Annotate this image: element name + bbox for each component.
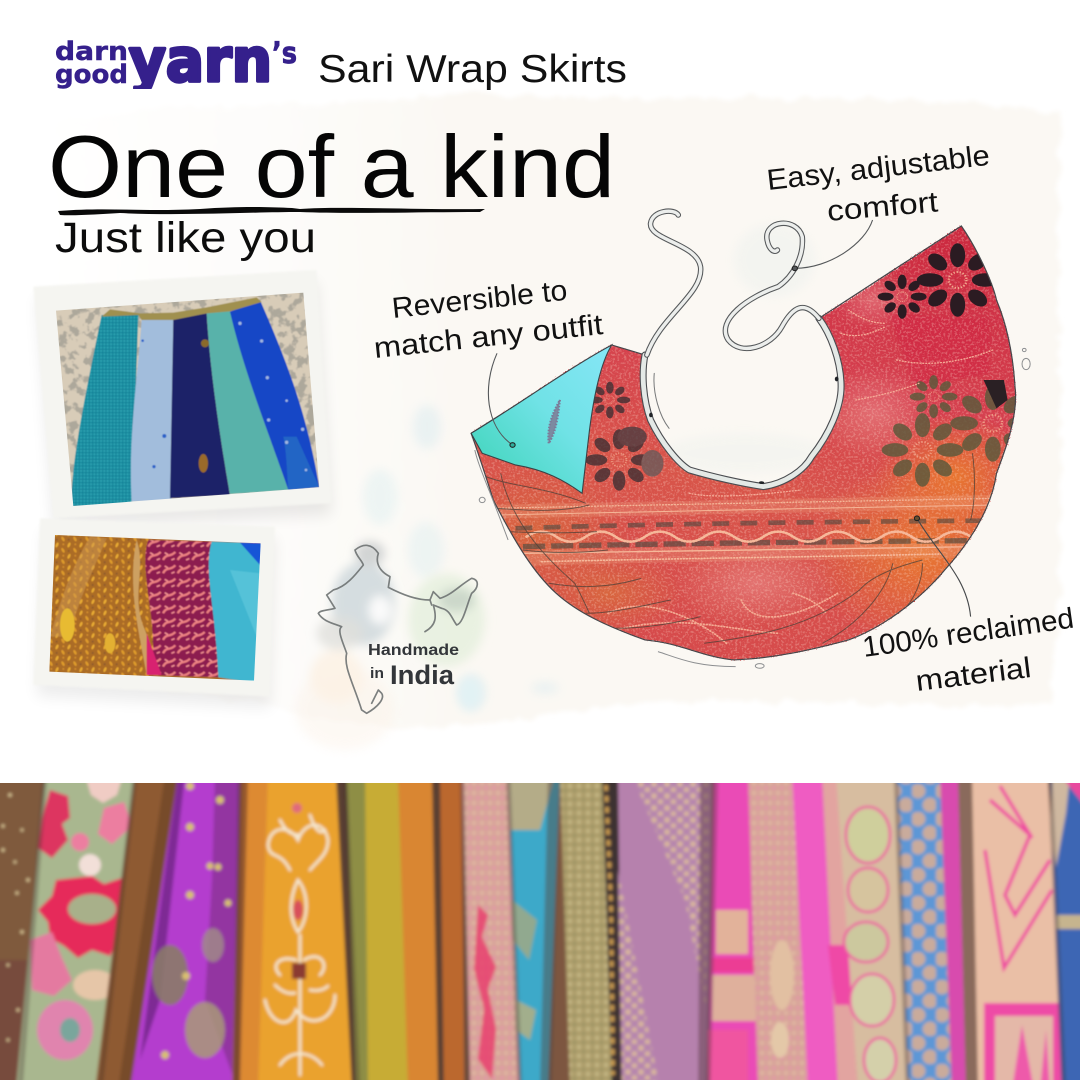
map outline bbox=[318, 545, 477, 713]
cream watercolor panel bbox=[20, 92, 1062, 728]
stripe: purple silk bbox=[130, 775, 240, 1080]
map label bbox=[368, 642, 459, 690]
stripe: blue circles bbox=[896, 775, 952, 1080]
fabric speckle bbox=[471, 223, 1019, 663]
photo: blue skirts hanging bbox=[33, 270, 332, 530]
logo: darn good yarn's: yarn bbox=[129, 26, 272, 96]
subtitle: Just like you: Just like you bbox=[55, 214, 316, 262]
waistband eyelets bbox=[649, 377, 839, 484]
logo: darn good yarn's: ’s bbox=[272, 36, 297, 70]
stripe: blue edge bbox=[1050, 775, 1080, 1080]
leader line: reversible bbox=[488, 353, 515, 447]
sketch marks bbox=[475, 348, 1030, 668]
callout: reclaimed material: 100% reclaimed bbox=[861, 603, 1076, 664]
callout: reversible: Reversible to bbox=[390, 275, 569, 325]
callout: reversible: match any outfit bbox=[372, 309, 604, 365]
map watercolor wash bbox=[310, 541, 485, 710]
leader line: reclaimed material bbox=[914, 516, 971, 617]
stripe: cyan bbox=[508, 775, 560, 1080]
heading: Sari Wrap Skirts: Sari Wrap Skirts bbox=[318, 48, 627, 91]
callout: reversible bbox=[372, 275, 604, 365]
logo: darn good yarn's bbox=[56, 40, 296, 89]
fabric colour washes bbox=[836, 485, 991, 629]
map: Handmade in India bbox=[310, 541, 485, 713]
reversible teal flap bbox=[471, 345, 612, 493]
fold shadows bbox=[20, 775, 1064, 1080]
flowers bbox=[878, 243, 998, 319]
brush underline bbox=[58, 207, 485, 215]
title: One of a kind: One of a kind bbox=[48, 117, 615, 216]
stripe: gold coil bbox=[540, 775, 622, 1080]
stripe: sage floral bbox=[16, 775, 135, 1080]
callout: reclaimed material bbox=[861, 603, 1076, 698]
callout: reclaimed material: material bbox=[914, 652, 1033, 698]
photo: fabric close-up bbox=[33, 518, 275, 708]
map label: in bbox=[370, 665, 384, 682]
callout: easy adjustable comfort: comfort bbox=[826, 186, 939, 228]
stripe: narrow gold magenta bbox=[822, 775, 858, 1080]
callout: easy adjustable comfort bbox=[765, 140, 991, 228]
callout: easy adjustable comfort: Easy, adjustable bbox=[765, 140, 991, 197]
skirt outline bbox=[471, 226, 1016, 660]
map label: Handmade bbox=[368, 642, 459, 659]
stripe: peach diamonds bbox=[972, 775, 1068, 1080]
waistband and ties bbox=[643, 211, 841, 487]
printed border bands bbox=[497, 310, 996, 643]
logo: darn good yarn's: good bbox=[55, 60, 128, 90]
tie halo bbox=[734, 223, 815, 297]
stripe: olive yellow bbox=[346, 775, 412, 1080]
stripe: magenta narrow bbox=[940, 775, 966, 1080]
illustration: wrap skirt bbox=[438, 211, 1037, 668]
map label: India bbox=[390, 660, 455, 690]
stripe: peach brocade + ribbon bbox=[748, 775, 838, 1080]
watercolor blots bbox=[295, 405, 559, 750]
leader line: adjustable comfort bbox=[792, 220, 873, 271]
stripe: brown dotted bbox=[0, 790, 32, 1080]
stripe: pink gold brocade bbox=[462, 775, 520, 1080]
logo: darn good yarn's: darn bbox=[55, 37, 128, 67]
drape fold lines bbox=[486, 453, 974, 643]
fabric photo band bbox=[0, 775, 1080, 1080]
stripe: gold embroidered bbox=[232, 775, 362, 1080]
skirt body bbox=[471, 226, 1016, 660]
stripe: purple dotted bbox=[618, 775, 716, 1080]
stripe: pale gold swirl bbox=[836, 775, 908, 1080]
stripe: brown fold bbox=[94, 783, 166, 1080]
stripe: magenta bbox=[708, 775, 758, 1080]
stripe: orange bbox=[398, 775, 464, 1080]
